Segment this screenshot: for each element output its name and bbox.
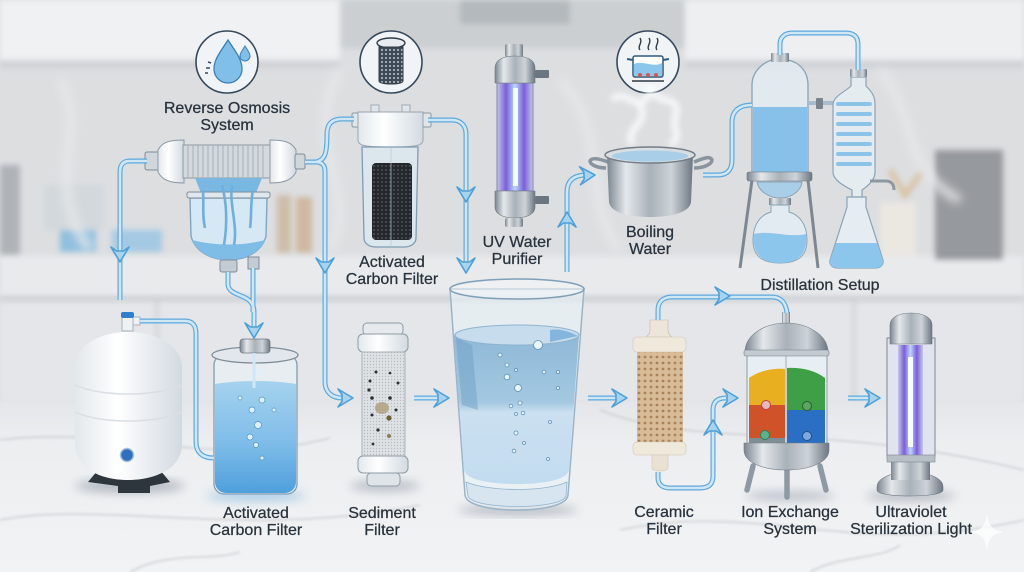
label: sediment filter: Filter [364,522,400,539]
label: ceramic filter [634,504,694,538]
label: ultraviolet sterilization light [850,504,972,538]
label: reverse osmosis [164,100,290,134]
label: ultraviolet sterilization light: Ultraviolet [875,504,947,521]
label: ion exchange system [741,504,839,538]
label: UV water purifier: UV Water [483,234,552,251]
label: reverse osmosis: System [200,117,254,134]
activated carbon water jar [212,339,298,494]
ultraviolet sterilization light [877,313,943,496]
icon: boiling water [617,31,679,93]
label: boiling water: Boiling [626,224,674,241]
main drinking glass [450,279,584,510]
label: reverse osmosis: Reverse Osmosis [164,100,290,117]
connecting pipes [120,33,870,488]
label: boiling water [626,224,674,258]
icon: activated carbon [360,31,422,93]
flow arrows [111,166,880,435]
label: activated carbon filter: Carbon Filter [346,271,439,288]
label: ion exchange system: System [763,521,817,538]
label: distillation setup: Distillation Setup [760,277,880,294]
label: UV water purifier [483,234,552,268]
ceramic filter [633,320,686,471]
ion exchange system [744,312,829,497]
label: ceramic filter: Ceramic [634,504,694,521]
reverse osmosis membrane and bowl [145,140,305,272]
boiling pot [590,147,712,217]
label: ion exchange system: Ion Exchange [741,504,839,521]
label: activated carbon jar: Activated [223,505,289,522]
storage tank [75,312,182,493]
label: activated carbon jar: Carbon Filter [210,522,303,539]
label: ceramic filter: Filter [646,521,682,538]
label: activated carbon jar [210,505,303,539]
distillation setup [740,53,894,268]
label: UV water purifier: Purifier [492,251,543,268]
label: boiling water: Water [629,241,672,258]
label: sediment filter [348,505,416,539]
label: ultraviolet sterilization light: Sterilization Light [850,521,972,538]
steam [612,90,677,145]
label: sediment filter: Sediment [348,505,416,522]
UV water purifier [495,44,549,227]
label: activated carbon filter [346,254,439,288]
activated carbon filter housing [352,105,431,247]
sediment filter [358,323,408,486]
icon: reverse osmosis [196,31,258,93]
sparkle watermark [970,514,1004,550]
label: activated carbon filter: Activated [359,254,425,271]
